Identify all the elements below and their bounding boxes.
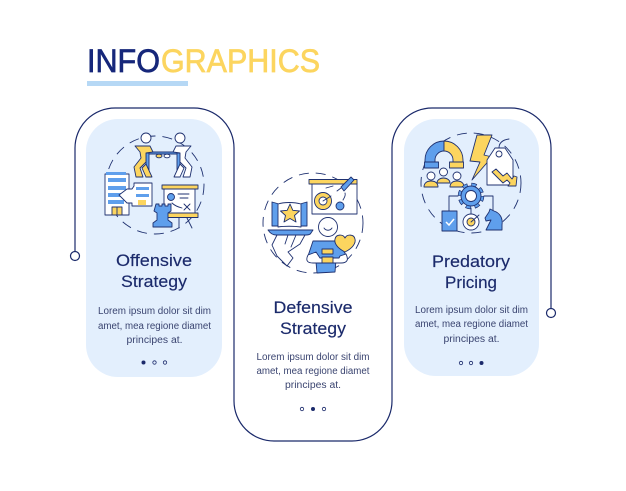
title underline <box>87 81 188 86</box>
heading: defensive strategy <box>274 299 352 338</box>
panel: predatory background <box>404 119 539 376</box>
heading: predatory pricing: Predatory <box>432 253 511 271</box>
price tag <box>487 139 517 186</box>
pagination dots: offensive <box>142 360 167 364</box>
target <box>463 214 479 230</box>
text: defensive body: amet, mea regione diamet <box>256 366 370 377</box>
person <box>307 218 355 273</box>
heading: predatory pricing: Pricing <box>445 274 497 292</box>
title <box>87 43 320 79</box>
rook <box>153 204 172 227</box>
pagination dots: defensive <box>300 407 326 411</box>
text: offensive body: Lorem ipsum dolor sit dim <box>98 306 211 317</box>
heading: predatory pricing <box>432 253 511 292</box>
gear <box>460 185 482 207</box>
heading: offensive strategy <box>116 252 192 291</box>
icon: defensive strategy <box>263 173 363 273</box>
hand <box>272 235 305 266</box>
connectors <box>449 196 493 214</box>
heading: defensive strategy: Defensive <box>274 299 352 317</box>
title: GRAPHICS <box>161 43 320 79</box>
title: INFO <box>87 43 160 79</box>
text: offensive body: amet, mea regione diamet <box>98 321 211 332</box>
heading: offensive strategy: Strategy <box>121 273 188 291</box>
icon: predatory pricing <box>421 133 521 233</box>
panel: offensive background <box>86 119 222 377</box>
text: predatory body <box>415 305 528 345</box>
building <box>105 172 129 215</box>
text: offensive body: principes at. <box>126 335 182 346</box>
star book on tray <box>268 202 313 235</box>
magnet <box>424 141 464 168</box>
text: defensive body <box>256 352 370 391</box>
text: defensive body: principes at. <box>285 380 341 391</box>
lightning <box>470 135 492 180</box>
text: offensive body <box>98 306 211 346</box>
text: predatory body: Lorem ipsum dolor sit dim <box>415 305 528 316</box>
left person <box>134 133 153 177</box>
table <box>146 152 180 177</box>
text: defensive body: Lorem ipsum dolor sit dim <box>256 352 370 363</box>
icon: offensive strategy <box>105 133 204 234</box>
text: predatory body: principes at. <box>444 334 500 345</box>
checklist <box>442 211 457 231</box>
right person <box>173 133 192 177</box>
heading: offensive strategy: Offensive <box>116 252 192 270</box>
customers <box>424 168 464 187</box>
connecting outline <box>70 108 556 441</box>
presentation board <box>160 185 198 228</box>
target board <box>309 177 357 214</box>
knight <box>485 209 502 230</box>
heading: defensive strategy: Strategy <box>280 320 347 338</box>
arrow office <box>119 183 152 206</box>
pagination dots: predatory <box>459 361 484 365</box>
text: predatory body: amet, mea regione diamet <box>415 319 528 330</box>
